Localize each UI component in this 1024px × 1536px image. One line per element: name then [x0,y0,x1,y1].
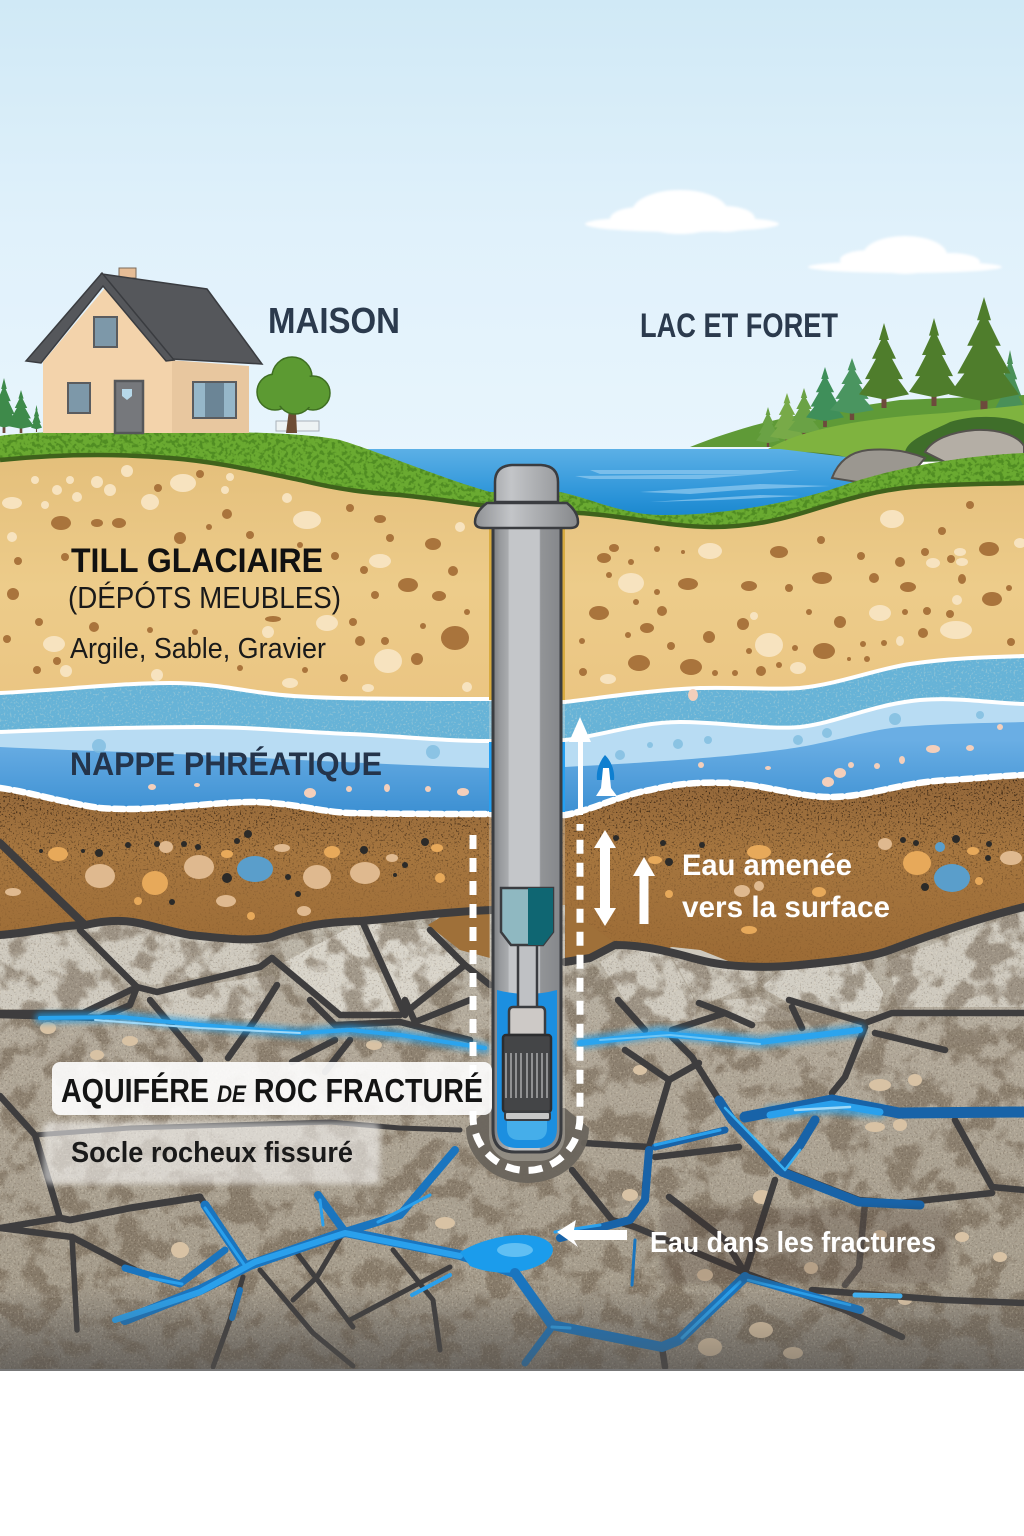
water inside casing [497,990,557,1148]
layer: till glaciaire sand [0,455,1024,720]
label: LAC ET FORET: LAC ET FORET [640,307,838,345]
brown soil grain, fading with depth [0,778,1024,962]
white water line 2 [0,699,1024,741]
pebbles in rock [40,1022,1007,1359]
rock top pale cells [3,915,1024,1020]
layer: aquifer pale band [0,699,1024,820]
label: argile sable gravier: Argile, Sable, Gravier [70,633,326,665]
blue fractures left [40,1017,512,1320]
grass texture [0,432,1024,525]
lake [365,449,900,530]
layer: brown soil [0,775,1024,980]
house left window [68,383,90,413]
label: socle rocheux fissuré: Socle rocheux fissuré [71,1137,353,1169]
house upper window [94,317,117,347]
blue fractures right [515,1030,1024,1363]
layer: aquifer deep band [0,722,1024,820]
pump motor [503,1035,551,1112]
soft white backdrop for subtitle [43,1122,380,1184]
house big window [193,382,236,418]
pump upper housing [501,888,553,945]
sky [0,0,1024,460]
house door [115,381,143,433]
forest and far shore [690,297,1024,470]
pump coupling [509,1007,545,1035]
central water pocket [460,1235,553,1273]
layer: fractured rock base [0,905,1024,1370]
well casing [493,520,561,1152]
label: TILL GLACIAIRE: TILL GLACIAIRE [71,542,323,580]
aquifer droplets [92,689,1003,798]
well grout bulb [466,1108,589,1183]
house chimney [119,268,136,278]
sand pebbles: cream [2,465,1024,692]
label box: aquifère de roc fracturé [52,1062,492,1115]
label: vers la surface: vers la surface [682,891,890,924]
dark backdrop for fractures label [660,1208,950,1284]
house main roof [102,274,262,364]
arrow: double headed [594,830,616,926]
label: aquifère de roc fracturé: AQUIFÉRE DE ROC FRACTURÉ [61,1072,483,1109]
arrow: up out of aquifer [569,717,591,815]
dotted line on top of soil [0,775,1024,815]
grass [0,432,1024,530]
label: dépôts meubles: (DÉPÓTS MEUBLES) [68,580,341,615]
tree near house [257,357,330,433]
arrow: up [633,857,655,924]
well assembly [466,465,589,1183]
shrubs and rocks on right shore [832,417,1024,484]
blue fracture glow [40,1017,880,1112]
rock bottom line [0,1369,1024,1371]
sand pebbles: brown [3,470,1015,682]
arrow: to fracture [557,1220,627,1247]
soil stones [5,830,1022,934]
band speckles [0,658,1024,739]
cloud: right [808,236,1002,274]
label: NAPPE PHRÉATIQUE: NAPPE PHRÉATIQUE [70,746,382,782]
house [26,268,262,433]
house front roof edge [26,273,174,363]
well cap dome [495,465,558,502]
rock lower edge shading [0,1290,1024,1370]
house side wall [170,360,249,433]
rock crack network [0,843,1024,1367]
gold strips along till [489,528,565,700]
pump base [505,1112,550,1120]
white water line 1 [0,656,1024,702]
rock light speckle [0,905,1024,1370]
label: eau amenée: Eau amenée [682,849,852,882]
boundary line under grass [0,455,1024,527]
layer: aquifer upper band [0,656,1024,820]
small trees left [0,378,42,433]
cloud: left [585,190,779,234]
well flange [475,503,578,528]
dashed flow path around well [473,824,580,1170]
label: eau dans les fractures: Eau dans les fractures [650,1227,936,1259]
water highlight [507,1118,547,1140]
well annular sleeve [489,525,565,1161]
rock dark speckle [0,905,1024,1370]
label: MAISON: MAISON [268,300,400,341]
pump shaft [518,944,537,1008]
icon: water jet [596,755,617,796]
rock blotches [0,905,1024,1370]
brown wedges beside the well [428,905,615,960]
blue strips along aquifer [489,742,565,812]
house gable wall [43,288,172,433]
